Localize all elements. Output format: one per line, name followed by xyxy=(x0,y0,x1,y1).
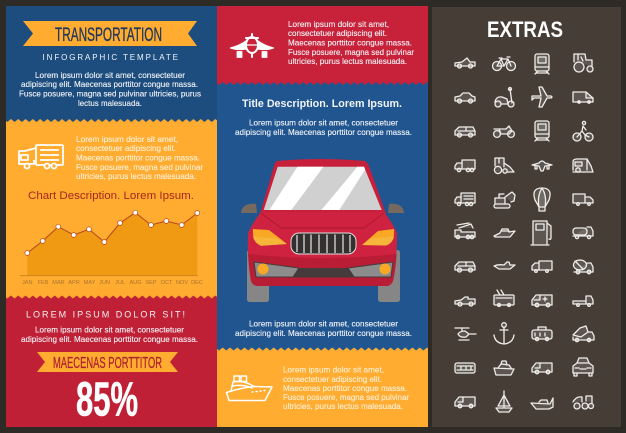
ship text: consectetuer adipiscing elit. xyxy=(283,374,382,384)
panel: chart section xyxy=(6,119,217,298)
truck text xyxy=(76,134,203,181)
area chart: OCT xyxy=(161,280,173,286)
car caption: Lorem ipsum dolor sit amet, consectetuer xyxy=(249,318,398,328)
extras heading: EXTRAS xyxy=(487,17,563,42)
icon: ship xyxy=(226,376,272,400)
panel: car xyxy=(217,82,428,350)
plane text: consectetuer adipiscing elit. xyxy=(288,28,387,38)
area chart: JUN xyxy=(99,280,110,286)
icon: truck xyxy=(19,145,63,168)
intro text: Lorem ipsum dolor sit amet, consectetuer xyxy=(35,70,185,80)
statistic banner xyxy=(37,352,178,372)
description text: Lorem ipsum dolor sit amet, consectetuer xyxy=(249,118,398,128)
ship text: Fusce posuere, magna sed pulvinar xyxy=(283,392,409,402)
intro text xyxy=(19,70,201,108)
area chart xyxy=(20,210,203,286)
description text: adipiscing elit. Maecenas porttitor congue massa. xyxy=(235,127,412,137)
intro text: Fusce posuere, magna sed pulvinar ultricies, purus xyxy=(19,88,201,98)
ship text: Lorem ipsum dolor sit amet, xyxy=(283,365,384,375)
subtitle: INFOGRAPHIC TEMPLATE xyxy=(42,53,178,62)
panel: transportation header xyxy=(6,6,217,122)
statistic text xyxy=(21,325,198,344)
panel: plane xyxy=(217,6,428,85)
plane text xyxy=(288,19,414,66)
ship text xyxy=(283,365,409,411)
plane text: Fusce posuere, magna sed pulvinar xyxy=(288,47,414,57)
panel: extras xyxy=(432,7,621,427)
panel: statistic xyxy=(6,296,217,427)
illustration: red car xyxy=(241,159,404,302)
area chart: DEC xyxy=(191,280,203,286)
title: TRANSPORTATION xyxy=(55,24,162,46)
area chart: NOV xyxy=(176,280,188,286)
area chart: FEB xyxy=(38,280,49,286)
area chart: APR xyxy=(68,280,80,286)
area chart: AUG xyxy=(129,280,142,286)
percentage: 85% xyxy=(76,374,138,426)
area chart: MAR xyxy=(52,280,65,286)
intro text: adipiscing elit. Maecenas porttitor congue massa. xyxy=(21,79,198,89)
banner label: MAECENAS PORTTITOR xyxy=(53,355,162,372)
area chart: JUL xyxy=(115,280,125,286)
description title: Title Description. Lorem Ipsum. xyxy=(242,98,402,110)
area chart: JAN xyxy=(22,280,33,286)
icon grid xyxy=(455,54,594,412)
truck text: Maecenas porttitor congue massa. xyxy=(76,152,200,162)
truck text: Fusce posuere, magna sed pulvinar xyxy=(76,162,203,172)
intro text: lectus malesuada. xyxy=(78,98,142,108)
statistic heading: LOREM IPSUM DOLOR SIT! xyxy=(26,309,185,319)
description text xyxy=(235,118,412,137)
area chart: MAY xyxy=(84,280,96,286)
statistic text: Lorem ipsum dolor sit amet, consectetuer xyxy=(35,325,184,335)
icon: plane xyxy=(230,34,274,58)
area chart: SEP xyxy=(145,280,157,286)
chart heading: Chart Description. Lorem Ipsum. xyxy=(28,190,194,202)
plane text: ultricies, purus lectus malesuada. xyxy=(288,56,407,66)
truck text: consectetuer adipiscing elit. xyxy=(76,143,176,153)
statistic text: adipiscing elit. Maecenas porttitor congue massa. xyxy=(21,334,198,344)
plane text: Maecenas porttitor congue massa. xyxy=(288,38,412,48)
car caption xyxy=(235,318,412,338)
truck text: ultricies, purus lectus malesuada. xyxy=(76,171,196,181)
ship text: ultricies, purus lectus malesuada. xyxy=(283,401,403,411)
title banner xyxy=(23,21,197,46)
plane text: Lorem ipsum dolor sit amet, xyxy=(288,19,389,29)
panel: ship xyxy=(217,348,428,427)
truck text: Lorem ipsum dolor sit amet, xyxy=(76,134,178,144)
car caption: adipiscing elit. Maecenas porttitor congue massa. xyxy=(235,328,412,338)
ship text: Maecenas porttitor congue massa. xyxy=(283,383,407,393)
